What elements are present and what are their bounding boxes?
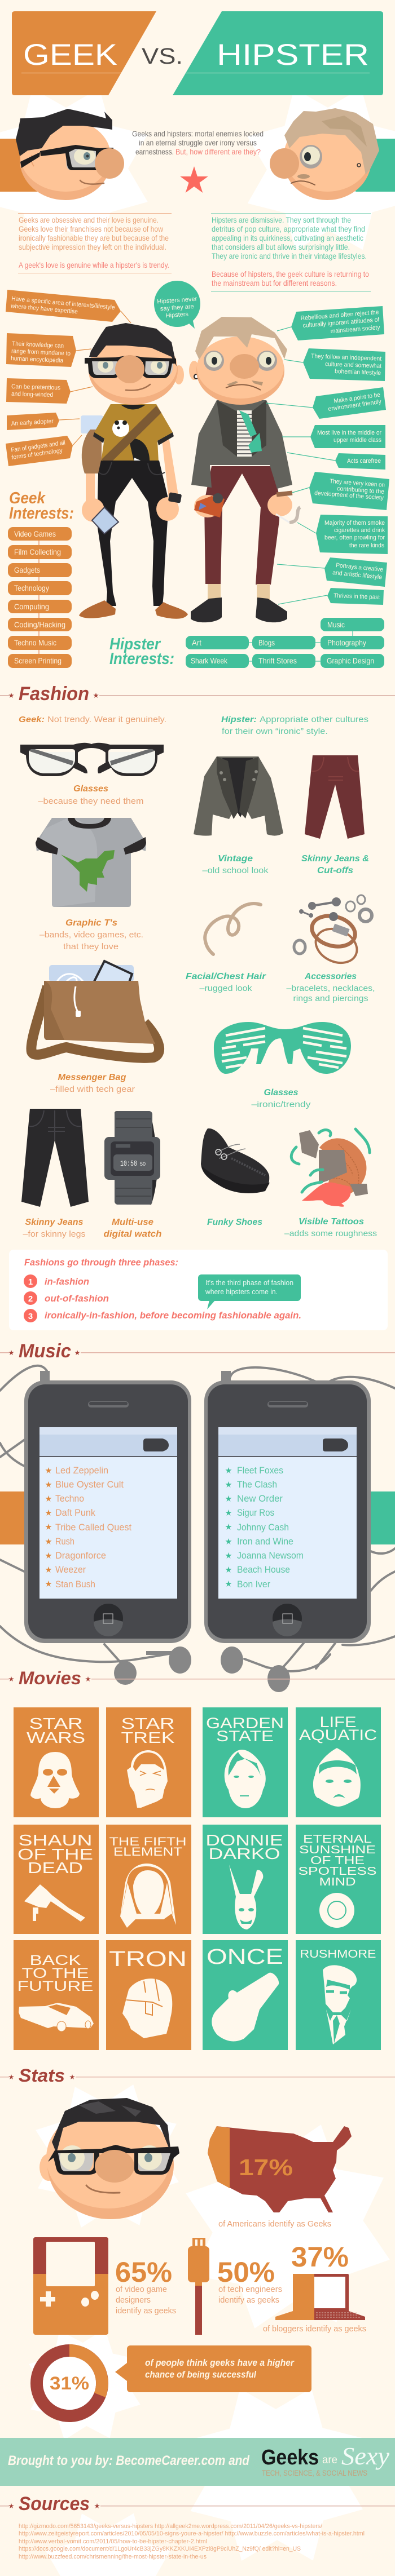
hipster shoes bbox=[191, 597, 287, 622]
label: skinny jeans and cut-offs bbox=[301, 854, 369, 875]
fashion intro: hipster: Appropriate other cultures bbox=[260, 715, 368, 724]
hipster title panel: HIPSTER bbox=[217, 38, 369, 72]
geek description: ironically fashionable they are but because of the bbox=[19, 233, 169, 242]
donut chart: 31% bbox=[37, 2344, 108, 2416]
intro text: But, how different are they? bbox=[175, 147, 261, 156]
poster: Star Trek: STAR bbox=[121, 1715, 175, 1732]
label: skinny jeans: –for skinny legs bbox=[23, 1229, 86, 1239]
tag: creative: and artistic lifestyle bbox=[332, 569, 382, 581]
versus label: VS. bbox=[142, 44, 183, 69]
label: skinny jeans bbox=[23, 1218, 86, 1239]
laptop: 37%: of bloggers identify as geeks bbox=[263, 2324, 366, 2334]
donut chart: 31%: 31% bbox=[50, 2373, 89, 2393]
hanging shutter shades bbox=[239, 410, 262, 453]
hipster pants bbox=[204, 466, 279, 585]
handheld console: 65%: identify as geeks bbox=[116, 2306, 176, 2316]
phase 3: ironically-in-fashion, before becoming fashionable again. bbox=[45, 1310, 301, 1321]
hipster interests list: Shark Week bbox=[191, 656, 228, 665]
poster: Eternal Sunshine bbox=[296, 1825, 381, 1934]
poster: Donnie Darko: DONNIE bbox=[205, 1831, 283, 1849]
geek description: subjective impression they left on the individual. bbox=[19, 242, 166, 251]
laptop: 37%: 37% bbox=[291, 2241, 349, 2273]
poster: Star Trek: TREK bbox=[121, 1729, 175, 1746]
label: vintage bbox=[202, 854, 269, 875]
poster: Life Aquatic: LIFE bbox=[319, 1714, 357, 1730]
label: digital watch: Multi-use bbox=[112, 1218, 153, 1227]
icon: black skinny jeans bbox=[21, 1109, 89, 1207]
hipster interests list: Blogs bbox=[258, 638, 275, 647]
label: accessories: rings and piercings bbox=[293, 994, 368, 1003]
geek band list: Daft Punk bbox=[55, 1507, 95, 1518]
tag: middle class bbox=[282, 425, 385, 448]
hipster band list: Fleet Foxes bbox=[237, 1465, 283, 1476]
poster: Donnie Darko: DARKO bbox=[209, 1845, 280, 1862]
geek band list: Stan Bush bbox=[55, 1579, 95, 1590]
hipster title panel bbox=[173, 11, 383, 95]
tag: independent: They follow an independent bbox=[311, 353, 381, 362]
source links: http://www.verbal-vomit.com/2011/05/how-to-be-hipster-chapter-2.html bbox=[19, 2538, 207, 2545]
section heading: Fashion bbox=[0, 683, 395, 705]
hipster description: They are ironic and thrive in their vintage lifestyles. bbox=[212, 251, 367, 260]
geek interests list: Video Games bbox=[14, 529, 56, 538]
geek full figure bbox=[79, 323, 188, 619]
phase 2: out-of-fashion bbox=[45, 1293, 109, 1304]
label: ironic glasses: –ironic/trendy bbox=[252, 1100, 311, 1109]
tag: smoke bbox=[297, 515, 388, 554]
tag: independent: bohemian lifestyle bbox=[335, 368, 381, 377]
tag: knowledge bbox=[6, 333, 91, 367]
usb plug: 50%: of tech engineers bbox=[218, 2285, 282, 2294]
label: accessories: –bracelets, necklaces, bbox=[287, 984, 375, 993]
tag: smoke: the rare kinds bbox=[349, 542, 384, 549]
hipster interests heading bbox=[109, 635, 174, 668]
usb plug: 50%: 50% bbox=[217, 2256, 275, 2288]
band behind phones bbox=[0, 1491, 395, 1544]
label: graphic tees: –bands, video games, etc. bbox=[40, 930, 143, 940]
tag: independent: culture and somewhat bbox=[325, 361, 381, 370]
hipster band list: Johnny Cash bbox=[237, 1522, 289, 1533]
hipster description: that considers all but allows surprisingly little. bbox=[212, 242, 350, 251]
section heading: Music: Music bbox=[19, 1340, 71, 1362]
hipster band list: New Order bbox=[237, 1493, 283, 1504]
geek band list: Techno bbox=[55, 1493, 84, 1504]
poster: Shaun of the Dead: DEAD bbox=[28, 1859, 83, 1876]
icon: digital watch: 10:58 bbox=[120, 1159, 137, 1169]
tag: smoke: Majority of them smoke bbox=[324, 520, 385, 526]
tag: past: Thrives in the past bbox=[333, 592, 380, 601]
label: graphic tees bbox=[40, 918, 143, 951]
geek interests list: Techno Music bbox=[14, 638, 56, 647]
geek description: Geeks are obsessive and their love is genuine. bbox=[19, 215, 159, 224]
icon: graphic t-shirt bbox=[36, 818, 146, 907]
section heading: Stats bbox=[0, 2065, 395, 2086]
tag: environment: Make a point to be bbox=[333, 392, 381, 405]
title banner bbox=[12, 11, 383, 95]
phase 1: in-fashion bbox=[45, 1276, 89, 1287]
poster: Once bbox=[203, 1940, 288, 2050]
intro text bbox=[132, 129, 264, 156]
label: vintage: Vintage bbox=[218, 854, 253, 864]
geek band list bbox=[45, 1465, 131, 1590]
geek band list: Led Zeppelin bbox=[55, 1465, 108, 1476]
tag: knowledge: Their knowledge can bbox=[12, 340, 64, 349]
tag: knowledge: human encyclopedia bbox=[11, 355, 64, 364]
hipster phase bubble bbox=[198, 1274, 301, 1309]
intro text: earnestness. bbox=[135, 147, 174, 156]
hipster band list: Iron and Wine bbox=[237, 1536, 293, 1547]
callout: success bbox=[115, 2345, 311, 2392]
section heading: Music bbox=[0, 1340, 395, 1362]
tag: carefree: Acts carefree bbox=[347, 458, 381, 464]
hipster band list bbox=[225, 1465, 304, 1590]
section heading: Stats: Stats bbox=[19, 2065, 65, 2086]
fashion intro: hipster: Hipster: bbox=[221, 715, 257, 724]
label: graphic tees: Graphic T's bbox=[65, 918, 117, 928]
geek head illustration bbox=[0, 109, 124, 200]
tag: pretentious bbox=[6, 378, 93, 404]
poster: Shaun of the Dead: SHAUN bbox=[18, 1831, 93, 1849]
label: graphic tees: that they love bbox=[63, 942, 118, 951]
icon: digital watch bbox=[104, 1111, 160, 1205]
logo: Geeks are Sexy: are bbox=[322, 2454, 337, 2466]
geek description: A geek's love is genuine while a hipster's is trendy. bbox=[19, 260, 169, 269]
label: visible tattoos: –adds some roughness bbox=[284, 1229, 377, 1238]
poster: Star Wars: STAR bbox=[29, 1715, 82, 1732]
tag: environment bbox=[266, 387, 386, 419]
map: 17% of Americans: 17% bbox=[239, 2154, 293, 2180]
icon: chest hair curl bbox=[205, 904, 261, 954]
logo: Geeks are Sexy: Sexy bbox=[341, 2442, 389, 2470]
hipster interests list: Music bbox=[327, 620, 345, 629]
label: digital watch: digital watch bbox=[104, 1229, 162, 1239]
tag: rebellious: Rebellious and often reject the bbox=[300, 309, 379, 322]
hipster interests list bbox=[186, 618, 384, 668]
phase 1: 1 bbox=[28, 1277, 33, 1287]
poster: The Fifth Element: ELEMENT bbox=[113, 1845, 182, 1858]
geek interests heading bbox=[9, 489, 74, 523]
tag: pretentious: and long-winded bbox=[11, 391, 53, 399]
hipster interests list: Thrift Stores bbox=[258, 656, 297, 665]
poster: Shaun of the Dead bbox=[14, 1825, 99, 1934]
poster: Tron bbox=[106, 1940, 191, 2050]
bag behind geek bbox=[81, 415, 103, 473]
hipster interests heading: Hipster bbox=[109, 635, 161, 653]
tag: rebellious: culturally ignorant attitudes of bbox=[302, 316, 380, 329]
geek head bbox=[85, 323, 184, 405]
poster: Eternal Sunshine: MIND bbox=[319, 1876, 356, 1888]
logo: Geeks are Sexy bbox=[261, 2442, 389, 2477]
tag: specific area: where they have expertise bbox=[10, 303, 78, 315]
hipster description bbox=[211, 213, 371, 292]
fashion intro: geek: Geek: bbox=[19, 715, 45, 724]
tag: carefree bbox=[287, 453, 385, 470]
geek band list: Rush bbox=[55, 1536, 74, 1547]
hipster description: detritus of pop culture, appropriate what they find bbox=[212, 224, 365, 233]
poster: Garden State: STATE bbox=[216, 1728, 274, 1745]
intro text: Geeks and hipsters: mortal enemies locked bbox=[132, 129, 264, 138]
poster: The Fifth Element: THE FIFTH bbox=[109, 1835, 186, 1848]
geek interests list: Computing bbox=[14, 602, 49, 611]
geek interests heading: Geek bbox=[9, 489, 46, 507]
tag: society: development of the society bbox=[314, 490, 384, 502]
source links bbox=[19, 2523, 365, 2560]
label: funky shoes: Funky Shoes bbox=[207, 1218, 262, 1227]
handheld console: 65%: of video game bbox=[116, 2285, 167, 2294]
icon: digital watch: 50 bbox=[140, 1161, 146, 1167]
hipster head illustration bbox=[270, 108, 395, 200]
label: glasses bbox=[38, 784, 143, 806]
hipster band list: Bon Iver bbox=[237, 1579, 270, 1590]
icon: koi tattoo bbox=[291, 1129, 370, 1207]
socks bbox=[208, 584, 270, 600]
label: skinny jeans: Skinny Jeans bbox=[25, 1218, 84, 1227]
geek band list: Dragonforce bbox=[55, 1550, 106, 1561]
phone: hipster playlist bbox=[204, 1371, 371, 1643]
label: ironic glasses: Glasses bbox=[264, 1088, 299, 1097]
tag: smoke: beer, often prowling for bbox=[324, 534, 385, 541]
section heading: Sources bbox=[0, 2493, 395, 2515]
hipster band list: The Clash bbox=[237, 1479, 277, 1490]
fashion intro: hipster: for their own “ironic” style. bbox=[222, 727, 328, 736]
geek interests list: Gadgets bbox=[14, 565, 40, 574]
poster: Garden State bbox=[203, 1707, 288, 1817]
label: visible tattoos bbox=[284, 1217, 377, 1238]
geek interests list: Film Collecting bbox=[14, 547, 61, 556]
label: facial hair: Facial/Chest Hair bbox=[186, 972, 266, 981]
icon: messenger bag bbox=[31, 961, 159, 1058]
source links: http://gizmodo.com/5653143/geeks-versus-hipsters http://allgeek2me.wordpress.com/2011/04/26/geeks-vs-hipsters/ bbox=[19, 2523, 323, 2530]
poster: Donnie Darko bbox=[203, 1825, 288, 1934]
geek band list: Tribe Called Quest bbox=[55, 1522, 131, 1533]
spray can bbox=[194, 493, 225, 517]
label: ironic glasses bbox=[252, 1088, 311, 1109]
poster: Back to the Future bbox=[14, 1940, 99, 2050]
label: messenger bag: –filled with tech gear bbox=[50, 1085, 135, 1094]
hipster full figure bbox=[189, 317, 300, 622]
tag: creative bbox=[277, 557, 387, 587]
logo: Geeks are Sexy: Geeks bbox=[261, 2446, 319, 2469]
poster: Life Aquatic: AQUATIC bbox=[299, 1727, 377, 1743]
callout: success: chance of being successful bbox=[145, 2369, 257, 2380]
source links: http://www.buzzfeed.com/chrismenning/the-most-hipster-state-in-the-us bbox=[19, 2553, 207, 2560]
tag: environment: environment friendly bbox=[328, 399, 382, 413]
tag: early adopter: An early adopter bbox=[11, 418, 54, 427]
label: digital watch bbox=[104, 1218, 162, 1239]
icon: red jeans bbox=[305, 755, 365, 839]
hipster description: the mainstream but for different reasons. bbox=[212, 278, 337, 287]
hipster head bbox=[189, 317, 287, 405]
poster: Back to the Future: TO THE bbox=[21, 1966, 89, 1981]
label: glasses: –because they need them bbox=[38, 796, 143, 806]
label: accessories: Accessories bbox=[304, 972, 357, 981]
geek band list: Weezer bbox=[55, 1564, 86, 1575]
callout: success: of people think geeks have a higher bbox=[145, 2357, 295, 2368]
source links: http://www.zeitgeistyreport.com/articles/2010/05/05/10-signs-youre-a-hipster/ http://www.buzzle.com/articles/what-is-a-hipster.html bbox=[19, 2530, 365, 2537]
hipster band list: Sigur Ros bbox=[237, 1507, 274, 1518]
section heading: Movies bbox=[0, 1668, 395, 1688]
tag: specific area bbox=[6, 290, 131, 323]
tag: middle class: Most live in the middle or bbox=[317, 430, 381, 436]
hipster phase bubble: It's the third phase of fashion bbox=[205, 1278, 293, 1287]
hipster phase bubble: where hipsters come in. bbox=[205, 1287, 278, 1296]
phase 2 bbox=[24, 1291, 109, 1305]
hipster band list: Beach House bbox=[237, 1564, 290, 1575]
panel: fashion phases bbox=[9, 1250, 388, 1330]
hipster interests list: Graphic Design bbox=[327, 656, 374, 665]
map: 17% of Americans bbox=[208, 2126, 352, 2229]
tag: society: contributing to the bbox=[337, 485, 384, 495]
tag: smoke: cigarettes and drink bbox=[334, 527, 385, 534]
hipster interests heading: Interests: bbox=[109, 650, 174, 668]
label: skinny jeans and cut-offs: Skinny Jeans & bbox=[301, 854, 369, 864]
poster: Star Wars bbox=[14, 1707, 99, 1817]
tag: rebellious: mainstream society bbox=[330, 324, 380, 335]
hipster interests list: Art bbox=[192, 638, 201, 647]
phase 1 bbox=[24, 1274, 89, 1288]
icon: vintage jacket bbox=[194, 756, 283, 836]
section heading: Fashion: Fashion bbox=[19, 683, 89, 705]
usb plug: 50%: identify as geeks bbox=[218, 2295, 279, 2305]
speech bubble bbox=[154, 281, 200, 329]
tag: society bbox=[292, 472, 389, 510]
geek interests list: Screen Printing bbox=[14, 656, 62, 665]
poster: Life Aquatic bbox=[296, 1707, 381, 1817]
geek description bbox=[18, 213, 172, 273]
geek interests list: Coding/Hacking bbox=[14, 620, 65, 629]
speech bubble: Hipsters never bbox=[157, 296, 198, 305]
speech bubble: Hipsters bbox=[165, 311, 189, 319]
hipster band list: Joanna Newsom bbox=[237, 1550, 304, 1561]
poster: Garden State: GARDEN bbox=[206, 1715, 284, 1732]
icon: funky shoe bbox=[201, 1128, 270, 1193]
tag: gadgets: Fan of gadgets and all bbox=[11, 440, 65, 454]
icon: accessories bbox=[294, 895, 372, 969]
tag: knowledge: range from mundane to bbox=[11, 348, 71, 357]
label: vintage: –old school look bbox=[202, 866, 269, 875]
geek interests list bbox=[8, 527, 72, 668]
tag: creative: Portrays a creative bbox=[336, 562, 383, 573]
geek title panel: GEEK bbox=[23, 38, 117, 72]
wrist watch bbox=[168, 492, 182, 503]
handheld console: 65% bbox=[33, 2237, 176, 2335]
icon: red star bbox=[180, 166, 208, 193]
handheld console: 65%: designers bbox=[116, 2295, 151, 2305]
tag: early adopter bbox=[7, 413, 80, 430]
label: glasses: Glasses bbox=[73, 784, 108, 794]
speech bubble: say they are bbox=[160, 303, 194, 312]
poster: Star Trek bbox=[106, 1707, 191, 1817]
phases heading: Fashions go through three phases: bbox=[24, 1257, 178, 1268]
phase 2: 2 bbox=[28, 1294, 33, 1304]
poster: Eternal Sunshine: SUNSHINE bbox=[299, 1844, 376, 1856]
geek interests heading: Interests: bbox=[9, 504, 74, 523]
tag: past bbox=[278, 588, 384, 605]
phone: geek playlist bbox=[24, 1371, 191, 1643]
geek head illustration: stats bbox=[40, 2098, 179, 2219]
poster: Tron: TRON bbox=[109, 1948, 187, 1971]
fashion intro: geek: Not trendy. Wear it genuinely. bbox=[47, 715, 166, 724]
geek shoes bbox=[79, 600, 188, 619]
tablet bbox=[92, 507, 118, 534]
tag: specific area: Have a specific area of interests/lifestyle bbox=[11, 295, 115, 311]
hipster interests list: Photography bbox=[327, 638, 366, 647]
poster: Eternal Sunshine: OF THE bbox=[310, 1854, 365, 1867]
earphone wires bbox=[0, 1366, 395, 1692]
geek title panel bbox=[12, 11, 156, 95]
label: visible tattoos: Visible Tattoos bbox=[299, 1217, 364, 1227]
usb plug: 50% bbox=[188, 2238, 282, 2335]
poster: Shaun of the Dead: OF THE bbox=[17, 1845, 93, 1863]
poster: Back to the Future: BACK bbox=[29, 1953, 81, 1968]
tag: independent bbox=[284, 348, 385, 381]
label: accessories bbox=[287, 972, 375, 1003]
hipster jacket bbox=[191, 400, 292, 489]
callout tags: hipster traits bbox=[266, 306, 389, 605]
poster: Star Wars: WARS bbox=[27, 1729, 85, 1746]
poster: Back to the Future: FUTURE bbox=[17, 1979, 94, 1994]
poster: Eternal Sunshine: ETERNAL bbox=[303, 1833, 372, 1845]
tag: rebellious bbox=[277, 306, 384, 340]
poster: Eternal Sunshine: SPOTLESS bbox=[298, 1865, 377, 1878]
logo: Geeks are Sexy: TECH, SCIENCE, & SOCIAL NEWS bbox=[262, 2468, 367, 2477]
hipster description: Hipsters are dismissive. They sort through the bbox=[212, 215, 351, 224]
label: messenger bag: Messenger Bag bbox=[58, 1073, 126, 1082]
credits banner: Brought to you by: BecomeCareer.com and bbox=[8, 2453, 250, 2468]
tag: gadgets bbox=[6, 435, 82, 466]
label: facial hair bbox=[186, 972, 266, 993]
icon: shutter shades bbox=[214, 1022, 351, 1074]
handheld console: 65%: 65% bbox=[115, 2256, 172, 2288]
geek jeans bbox=[97, 461, 168, 606]
label: skinny jeans and cut-offs: Cut-offs bbox=[317, 866, 353, 875]
fashion intro: hipster bbox=[221, 715, 368, 736]
tag: society: They are very keen on bbox=[330, 478, 385, 489]
tag: pretentious: Can be pretentious bbox=[11, 383, 61, 391]
poster: The Fifth Element bbox=[106, 1825, 191, 1934]
hipster description: appealing in its quirkiness, cultivating an aesthetic bbox=[212, 233, 363, 242]
geek band list: Blue Oyster Cult bbox=[55, 1479, 124, 1490]
label: messenger bag bbox=[50, 1073, 135, 1094]
section heading: Sources: Sources bbox=[19, 2493, 90, 2515]
tag: middle class: upper middle class bbox=[333, 437, 381, 444]
map: 17% of Americans: of Americans identify as Geeks bbox=[218, 2219, 331, 2229]
callout tags: geek traits bbox=[6, 290, 131, 466]
poster: Rushmore: RUSHMORE bbox=[300, 1948, 376, 1960]
poster: Once: ONCE bbox=[207, 1945, 283, 1969]
poster: Rushmore bbox=[296, 1940, 381, 2050]
tag: gadgets: forms of technology bbox=[11, 447, 63, 461]
intro text: in an eternal struggle over irony versus bbox=[139, 138, 257, 147]
section heading: Movies: Movies bbox=[19, 1668, 81, 1688]
label: facial hair: –rugged look bbox=[200, 984, 252, 993]
laptop: 37% bbox=[263, 2241, 366, 2334]
geek description: Geeks love their franchises not because of how bbox=[19, 224, 164, 233]
phase 3: 3 bbox=[28, 1312, 33, 1321]
credits banner bbox=[0, 2438, 395, 2486]
icon: geek glasses bbox=[20, 743, 164, 776]
source links: https://docs.google.com/document/d/1LgoUr4cB33jZGy8KKZXKUI4EXPzi8gP9ciUhZ_Nz9fQ/ edit?hl=en_US bbox=[19, 2546, 301, 2552]
geek interests list: Technology bbox=[14, 583, 49, 592]
hipster description: Because of hipsters, the geek culture is returning to bbox=[212, 269, 369, 278]
cigarette and smoke bbox=[276, 507, 300, 523]
